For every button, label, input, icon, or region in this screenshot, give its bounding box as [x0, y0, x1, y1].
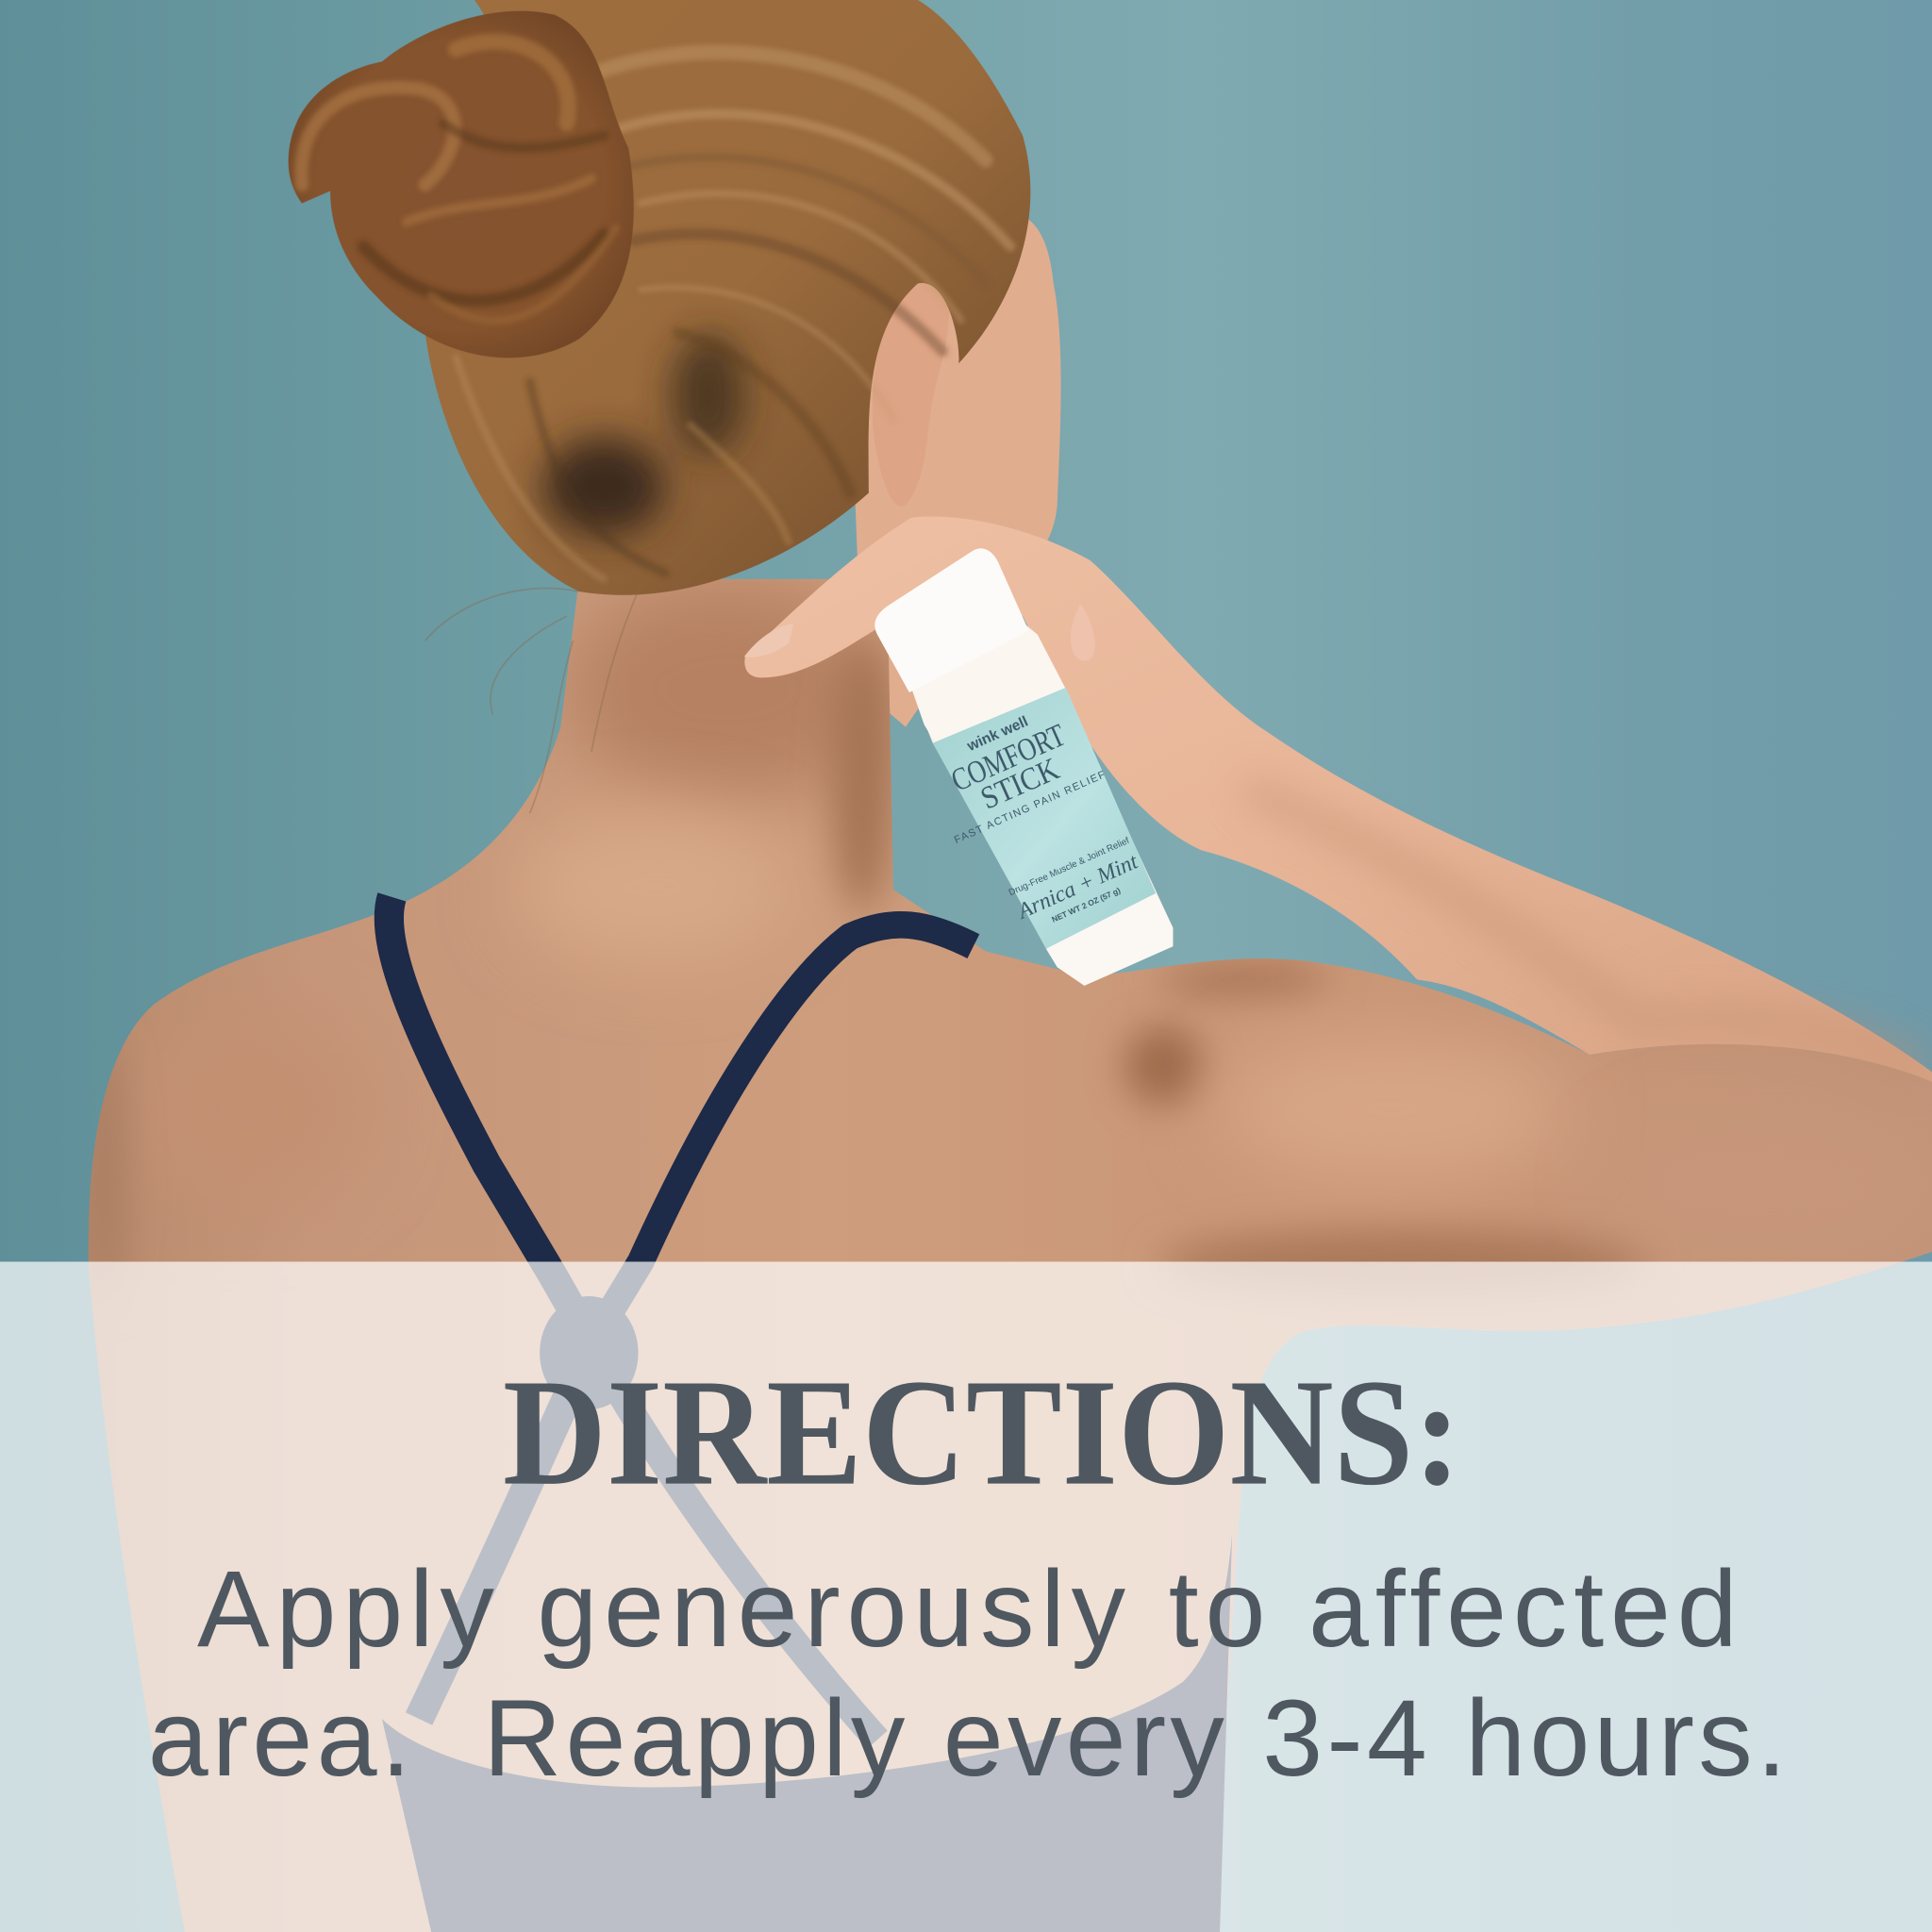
strap knot: [540, 1296, 639, 1409]
fingernail: index: [744, 624, 793, 658]
product name line 2: STICK: [975, 752, 1065, 817]
tagline: FAST ACTING PAIN RELIEF: [953, 769, 1108, 846]
heading: DIRECTIONS:: [503, 1349, 1461, 1518]
label: [933, 688, 1156, 949]
bottle body: [925, 632, 1173, 986]
hair strands: [456, 52, 1010, 579]
hair bun: [289, 11, 634, 358]
skin shading: [85, 579, 1932, 1306]
claim: Drug-Free Muscle & Joint Relief: [1008, 836, 1131, 898]
left strap: [389, 897, 591, 1719]
stray neck hairs: [425, 585, 641, 813]
bun strands: [301, 42, 616, 321]
directions text block: [148, 1349, 1787, 1799]
collar: [906, 624, 1070, 743]
product: comfort stick: [874, 548, 1173, 986]
product name line 1: COMFORT: [946, 718, 1071, 799]
fingernail: thumb: [1071, 604, 1095, 660]
face and cheek: [850, 212, 1061, 727]
forearm and hand: [744, 517, 1932, 1082]
dress bodice: [382, 1534, 1232, 1932]
label text, upper: [919, 693, 1108, 846]
brand: wink well: [964, 713, 1031, 755]
scent: Arnica + Mint: [1012, 849, 1141, 924]
cap: [874, 548, 1029, 692]
instruction line 1: Apply generously to affected: [197, 1549, 1738, 1670]
ear: [873, 281, 949, 507]
label text, lower: [1007, 836, 1148, 936]
instruction line 2: area. Reapply every 3-4 hours.: [148, 1678, 1787, 1799]
forearm shading: [1244, 789, 1923, 1070]
back, shoulders and upper arm: [89, 579, 1932, 1932]
hair: [425, 0, 1030, 595]
right strap: [591, 924, 974, 1740]
translucent directions panel: [0, 1261, 1932, 1932]
hair shadow under bun: [542, 333, 745, 536]
bottle base: [1046, 893, 1173, 986]
net weight: NET WT 2 OZ (57 g): [1050, 886, 1122, 924]
